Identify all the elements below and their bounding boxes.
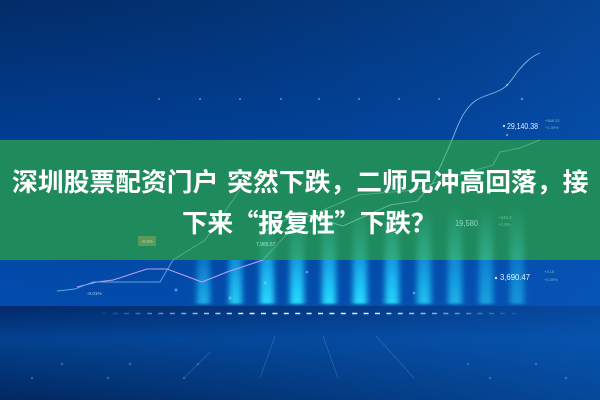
light beams <box>197 195 524 304</box>
line series: upper blue line <box>452 53 540 140</box>
title: 下来“报复性”下跌？ <box>182 203 436 240</box>
dashed horizon line <box>90 312 530 314</box>
floor streaks and dots <box>31 336 567 379</box>
banner labels <box>138 236 156 246</box>
value label: 0.01%: -0.01% <box>87 291 102 296</box>
title: 深圳股票配资门户 突然下跌，二师兄冲高回落，接 <box>12 162 588 199</box>
value label: 29,140.38: +568.32 <box>545 118 560 123</box>
green banner: 7,965.57 <box>256 242 276 248</box>
line series: lower blue line <box>57 260 173 291</box>
green banner: -0.8% <box>141 239 153 244</box>
value label: 3,690.47 <box>495 269 558 282</box>
green banner <box>0 140 600 260</box>
value label: 3,690.47: 3,690.47 <box>500 272 530 282</box>
title <box>12 162 588 240</box>
value label: 29,140.38: +1.99% <box>545 125 559 130</box>
grid dots <box>158 84 523 300</box>
value label: 3,690.47: +0.09% <box>544 277 558 282</box>
value label: 29,140.38: 29,140.38 <box>507 121 538 131</box>
value label: 29,140.38 <box>503 118 560 131</box>
green banner: +1.5% <box>498 222 511 227</box>
green banner: 19,580 <box>455 218 478 228</box>
line series: purple line <box>77 260 263 287</box>
green banner: +345.3 <box>498 215 512 220</box>
value label: 3,690.47: +3.18 <box>544 269 555 274</box>
